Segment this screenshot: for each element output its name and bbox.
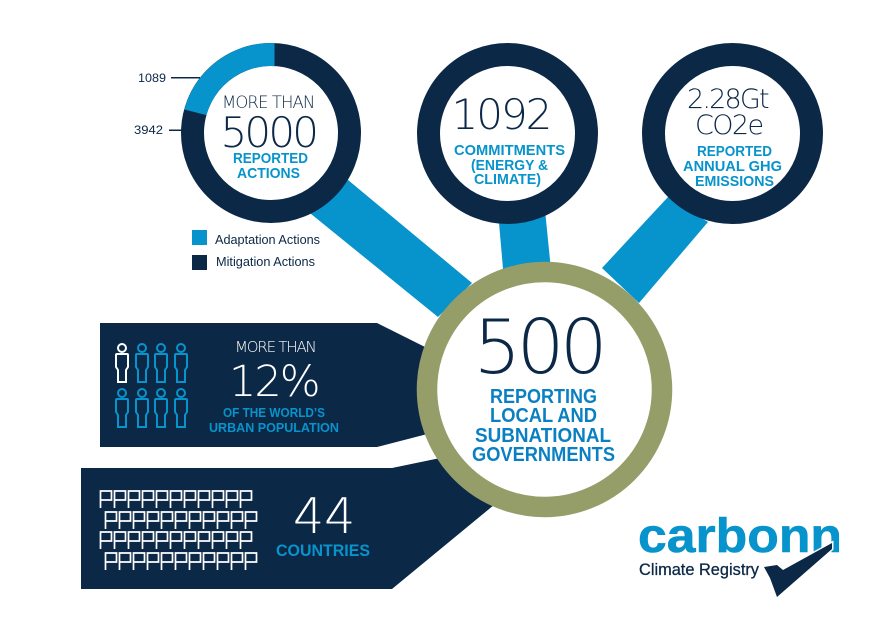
circle: reporting governments bbox=[427, 272, 662, 507]
circle: emissions: 2.28Gt bbox=[687, 84, 769, 115]
legend: Adaptation Actions bbox=[215, 233, 320, 247]
logo: carbonn Climate Registry: Climate Registry bbox=[639, 560, 759, 579]
circle: reporting governments: REPORTING bbox=[490, 386, 597, 408]
circle: commitments: CLIMATE) bbox=[474, 171, 541, 188]
circle: commitments: 1092 bbox=[452, 90, 550, 139]
circle: reporting governments: GOVERNMENTS bbox=[472, 444, 615, 466]
donut text: 5000 bbox=[220, 108, 316, 157]
countries text bbox=[276, 488, 370, 560]
icon: check mark bbox=[764, 543, 832, 597]
logo: carbonn Climate Registry: carbonn bbox=[638, 510, 842, 563]
leader lines and values: 1089 bbox=[138, 71, 166, 85]
urban population text bbox=[209, 338, 339, 435]
icon: flags bbox=[100, 491, 256, 570]
countries text: COUNTRIES bbox=[276, 542, 370, 560]
circle: emissions bbox=[654, 54, 812, 212]
circle: emissions: EMISSIONS bbox=[695, 173, 774, 190]
circle: reporting governments: LOCAL AND bbox=[490, 405, 597, 427]
circle: commitments: COMMITMENTS bbox=[454, 142, 565, 159]
panel: urban population bbox=[100, 323, 435, 447]
circle: commitments bbox=[428, 54, 586, 212]
donut text: MORE THAN bbox=[222, 93, 314, 112]
urban population text: MORE THAN bbox=[235, 338, 316, 356]
donut text: ACTIONS bbox=[237, 165, 300, 182]
logo: carbonn Climate Registry bbox=[638, 510, 842, 597]
countries text: 44 bbox=[293, 488, 355, 545]
legend bbox=[192, 230, 320, 270]
adaptation segment bbox=[184, 43, 274, 115]
legend: Mitigation Actions bbox=[216, 255, 315, 269]
leader lines and values bbox=[134, 71, 200, 137]
donut text: REPORTED bbox=[233, 150, 308, 167]
donut: reported actions bbox=[134, 43, 350, 212]
donut text bbox=[220, 93, 316, 182]
circle: reporting governments: SUBNATIONAL bbox=[475, 425, 611, 447]
circle: commitments: (ENERGY & bbox=[471, 157, 548, 174]
panel: countries bbox=[81, 457, 500, 589]
circle: reporting governments: 500 bbox=[474, 303, 603, 391]
leader lines and values: 3942 bbox=[134, 123, 163, 137]
circle: emissions: REPORTED bbox=[697, 143, 772, 160]
icon: people bbox=[116, 344, 187, 427]
urban population text: 12% bbox=[229, 357, 319, 407]
circle: emissions: ANNUAL GHG bbox=[683, 158, 782, 175]
urban population text: OF THE WORLD’S bbox=[223, 406, 325, 420]
connector bars bbox=[300, 165, 708, 317]
urban population text: URBAN POPULATION bbox=[209, 421, 339, 435]
circle: emissions: CO2e bbox=[695, 110, 762, 141]
